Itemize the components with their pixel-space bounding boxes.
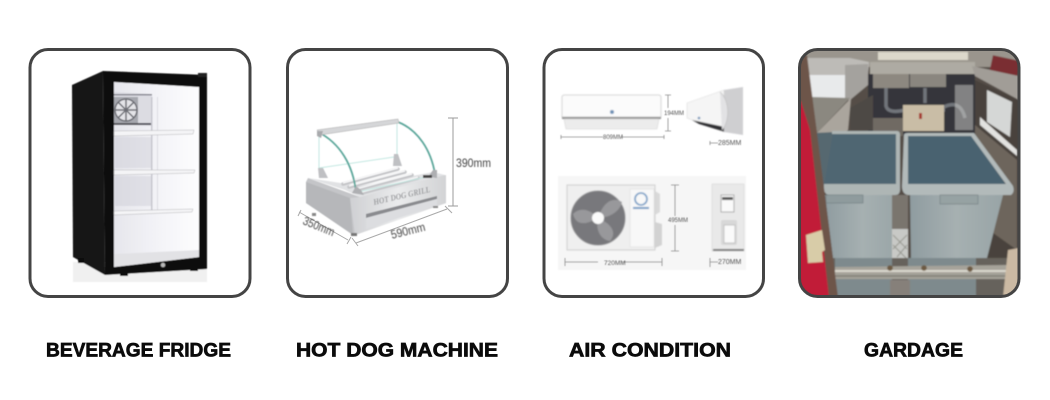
outdoor unit side xyxy=(712,184,744,251)
panel: hot dog machine xyxy=(288,50,508,296)
label: 590mm: 590mm xyxy=(390,222,427,242)
outdoor unit front xyxy=(567,185,662,250)
label: HOT DOG GRILL: HOT DOG GRILL xyxy=(371,184,431,207)
centre divider xyxy=(892,195,908,229)
panel: beverage fridge xyxy=(30,50,250,296)
photo: garbage bins xyxy=(799,49,1020,297)
icon: beverage fridge xyxy=(72,71,207,282)
indoor unit side xyxy=(687,87,743,135)
panel frame: hot dog machine xyxy=(288,50,508,296)
right counter and drawers xyxy=(972,66,1019,100)
panel: garbage storage photo xyxy=(799,49,1020,297)
label: 720MM: 720MM xyxy=(604,260,626,267)
panel frame: air condition xyxy=(544,50,764,296)
panel frame: garbage xyxy=(800,50,1019,296)
red door xyxy=(801,100,830,295)
label: 350mm: 350mm xyxy=(301,216,336,239)
label: 390mm: 390mm xyxy=(456,158,491,170)
label: 194MM: 194MM xyxy=(664,111,684,117)
panel: air condition xyxy=(544,50,764,296)
icon: hot dog grill xyxy=(306,119,446,236)
lower rail xyxy=(833,258,1007,295)
label: 285MM: 285MM xyxy=(718,140,742,147)
caption: gardage: GARDAGE xyxy=(864,340,963,362)
height dimension xyxy=(448,118,458,206)
caption: air condition: AIR CONDITION xyxy=(569,340,731,362)
label: 809MM: 809MM xyxy=(603,135,623,141)
dimension lines xyxy=(561,95,718,267)
panel frame: fridge xyxy=(30,50,250,296)
dimension labels xyxy=(603,111,742,267)
icon: air conditioner units xyxy=(558,87,746,270)
bin: right xyxy=(902,133,1014,258)
label: 270MM: 270MM xyxy=(718,259,742,266)
width dimension xyxy=(352,206,452,246)
left counter xyxy=(806,58,869,100)
caption: beverage fridge: BEVERAGE FRIDGE xyxy=(46,340,231,362)
label: 495MM: 495MM xyxy=(668,218,688,224)
caption: hot dog machine: HOT DOG MACHINE xyxy=(296,340,498,362)
indoor unit front xyxy=(562,95,661,129)
bin: left xyxy=(824,131,900,258)
depth dimension xyxy=(298,210,351,244)
